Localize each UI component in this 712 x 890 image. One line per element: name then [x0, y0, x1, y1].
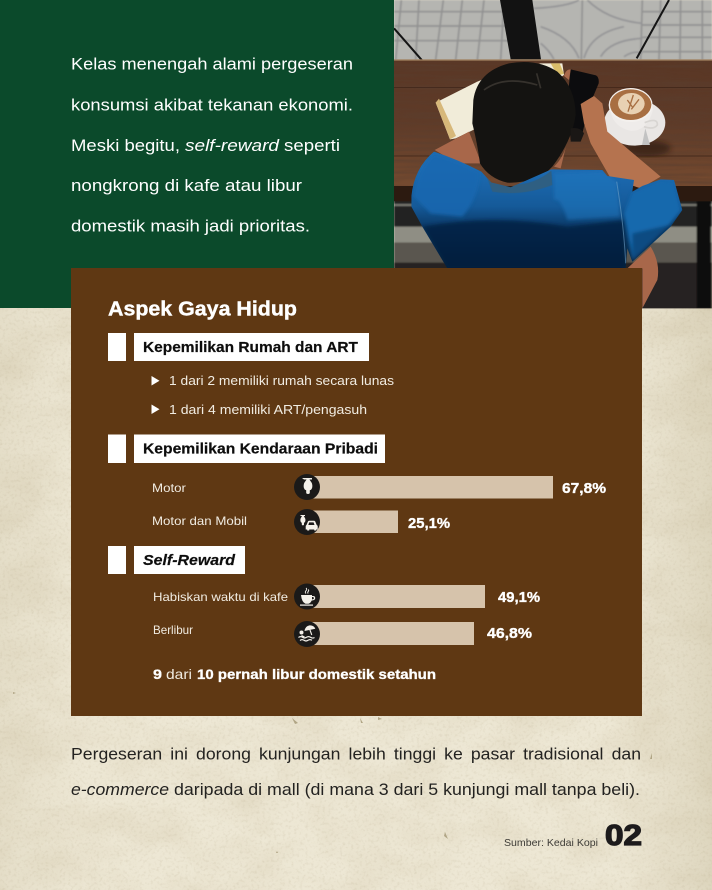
section: kepemilikan rumah dan ART: Kepemilikan Rumah dan ART	[143, 339, 358, 356]
closing paragraph	[71, 746, 641, 799]
smartphone	[567, 69, 599, 140]
section: kepemilikan kendaraan pribadi: Kepemilikan Kendaraan Pribadi	[143, 440, 378, 458]
forearm and hand	[435, 69, 661, 188]
bar: motor 67,8%: Motor	[152, 481, 186, 495]
page number: 02	[605, 820, 642, 852]
bar: motor 67,8%	[152, 474, 606, 500]
closing paragraph: daripada di mall (di mana 3 dari 5 kunjungi mall tanpa beli).	[174, 781, 640, 799]
bullet: ART: 1 dari 4 memiliki ART/pengasuh	[169, 402, 367, 417]
green header block	[0, 0, 394, 308]
section: kepemilikan kendaraan pribadi	[108, 434, 385, 463]
bullet: rumah lunas: 1 dari 2 memiliki rumah secara lunas	[169, 373, 395, 388]
bar: habiskan waktu di kafe 49,1%	[153, 584, 540, 610]
source credit: Sumber: Kedai Kopi	[504, 837, 598, 849]
intro paragraph: Kelas menengah alami pergeseran	[71, 54, 353, 74]
intro paragraph: self-reward	[185, 136, 280, 155]
bar: motor dan mobil 25,1%: 25,1%	[408, 515, 450, 532]
intro paragraph: domestik masih jadi prioritas.	[71, 216, 310, 236]
wooden table	[394, 59, 712, 201]
intro paragraph	[71, 54, 353, 236]
panel heading: Aspek Gaya Hidup	[108, 298, 297, 320]
closing paragraph: Pergeseran ini dorong kunjungan lebih tinggi ke pasar tradisional dan	[71, 746, 641, 764]
section: self-reward	[108, 546, 245, 574]
intro paragraph: seperti	[284, 136, 340, 155]
note: libur domestik: 9	[153, 666, 162, 682]
pavement	[394, 0, 712, 61]
bar: berlibur 46,8%	[153, 621, 532, 647]
bar: habiskan waktu di kafe 49,1%: Habiskan waktu di kafe	[153, 590, 288, 604]
paper background	[0, 300, 712, 890]
bar: berlibur 46,8%: 46,8%	[487, 625, 532, 642]
icon: beach umbrella and waves	[294, 621, 320, 647]
section: self-reward: Self-Reward	[143, 552, 236, 569]
lower floor behind the table	[394, 200, 712, 310]
notebook	[436, 63, 564, 139]
note: libur domestik: dari	[166, 666, 192, 682]
note: libur domestik: 10 pernah libur domestik setahun	[197, 666, 436, 682]
icon: scooter and car	[294, 509, 320, 535]
bar: motor 67,8%: 67,8%	[562, 480, 606, 497]
blue denim shirt	[407, 150, 687, 270]
bar: berlibur 46,8%: Berlibur	[153, 623, 193, 637]
hair	[472, 62, 584, 183]
icon: scooter	[294, 474, 320, 500]
shadow of cup on table	[624, 140, 671, 156]
panel: aspek gaya hidup	[71, 268, 642, 716]
intro paragraph: nongkrong di kafe atau libur	[71, 176, 302, 195]
coffee cup on saucer	[604, 88, 665, 146]
icon: coffee cup	[294, 584, 320, 610]
photo: person with phone and coffee at a cafe table	[394, 0, 712, 310]
bar: motor dan mobil 25,1%	[152, 509, 450, 535]
closing paragraph: e-commerce	[71, 781, 169, 799]
section: kepemilikan rumah dan ART	[108, 333, 369, 361]
intro paragraph: Meski begitu,	[71, 136, 180, 155]
thigh beside the table	[627, 247, 658, 308]
bar: motor dan mobil 25,1%: Motor dan Mobil	[152, 514, 247, 528]
black post and chair legs	[394, 0, 669, 61]
bar: habiskan waktu di kafe 49,1%: 49,1%	[498, 589, 540, 606]
intro paragraph: konsumsi akibat tekanan ekonomi.	[71, 96, 353, 114]
